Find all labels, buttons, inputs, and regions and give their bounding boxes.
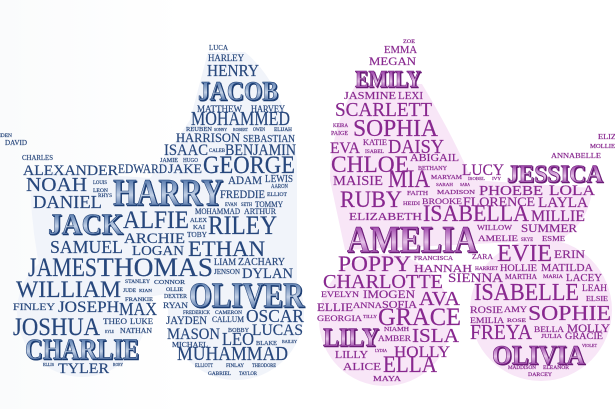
word cloud: boys' names in blue: ELLIOTT [195, 364, 213, 369]
word cloud: girls' names in pink: LEAH [582, 283, 608, 293]
word cloud: girls' names in pink: ANNABELLE [551, 152, 601, 160]
featured name: Jack: JACK [48, 208, 124, 241]
word cloud: boys' names in blue: ISAAC [164, 142, 208, 159]
word cloud: boys' names in blue: GEORGE [203, 152, 295, 179]
word cloud: girls' names in pink: MIA [388, 166, 430, 193]
word cloud: boys' names in blue: MOHAMMAD [195, 207, 240, 216]
word cloud: boys' names in blue: ELLIOT [267, 193, 287, 198]
word cloud: boys' names in blue: LEWIS [265, 174, 293, 185]
silhouette: blue pram [17, 52, 304, 380]
word cloud: boys' names in blue: ZACHARY [238, 257, 285, 268]
word cloud: boys' names in blue: REUBEN [186, 127, 213, 133]
word cloud: girls' names in pink: LILLY [335, 350, 368, 361]
word cloud: boys' names in blue: MATTHEW [197, 105, 242, 115]
word cloud: boys' names in blue: HUGO [183, 158, 199, 164]
word cloud: girls' names in pink: ERIN [554, 247, 585, 261]
word cloud: girls' names in pink: MILLIE [531, 208, 585, 225]
word cloud: boys' names in blue: CALLUM [212, 315, 244, 324]
word cloud: girls' names in pink: DAISY [388, 136, 444, 158]
word cloud: boys' names in blue: KYLE [105, 329, 114, 334]
word cloud: boys' names in blue: LUKE [130, 317, 153, 326]
word cloud: girls' names in pink: SIENNA [448, 270, 504, 285]
word cloud: boys' names in blue: HENRY [207, 61, 259, 80]
word cloud: boys' names in blue: THEODORE [252, 364, 276, 369]
word cloud: girls' names in pink: ISABELLE [474, 280, 579, 306]
word cloud: boys' names in blue: SAMUEL [50, 237, 123, 257]
word cloud: boys' names in blue: HARRISON [176, 130, 241, 145]
word cloud: girls' names in pink: FLORENCE [463, 195, 535, 209]
word cloud: girls' names in pink: EVIE [497, 241, 552, 267]
word cloud: girls' names in pink: GEORGIA [317, 313, 363, 323]
word cloud: boys' names in blue: OLLIE [166, 288, 183, 293]
featured name: Jacob: JACOB [198, 76, 278, 106]
word cloud: boys' names in blue: CONNOR [154, 279, 186, 286]
word cloud: boys' names in blue: DYLAN [242, 266, 293, 282]
word cloud: boys' names in blue: OSCAR [246, 306, 304, 326]
word cloud: girls' names in pink: SARAH [436, 182, 454, 187]
word cloud: girls' names in pink: JULIA [541, 334, 563, 340]
featured name: Jessica: JESSICA [507, 161, 603, 188]
word cloud: boys' names in blue: SEBASTIAN [243, 134, 295, 145]
word cloud: boys' names in blue: FINLEY [13, 303, 55, 313]
word cloud: girls' names in pink: FRANCISCA [414, 256, 454, 262]
word cloud: boys' names in blue: NATHAN [120, 327, 152, 335]
word cloud: boys' names in blue: LOUIS [93, 181, 107, 186]
word cloud: girls' names in pink: IMOGEN [363, 289, 416, 301]
word cloud: boys' names in blue: JAMES [28, 253, 97, 282]
word cloud: boys' names in blue: BENJAMIN [225, 142, 296, 159]
word cloud: girls' names in pink: HOLLY [394, 344, 450, 361]
word cloud: girls' names in pink: CHARLOTTE [323, 271, 443, 293]
word cloud: girls' names in pink: FAITH [407, 191, 429, 197]
word cloud: girls' names in pink: BETHANY [418, 165, 447, 172]
word cloud: girls' names in pink: ZARA [472, 252, 494, 261]
word cloud: girls' names in pink: WILLOW [477, 223, 513, 232]
word cloud: girls' names in pink: GRACIE [565, 331, 604, 341]
word cloud: girls' names in pink: ISABEL [365, 149, 385, 155]
word cloud: girls' names in pink: ZOE [403, 40, 415, 45]
word cloud: girls' names in pink: ELSIE [586, 295, 608, 303]
word cloud: boys' names in blue: JENSON [214, 268, 240, 276]
word cloud: boys' names in blue: JUDE [123, 289, 136, 294]
word cloud: girls' names in pink: ROSE [507, 318, 527, 324]
word cloud: boys' names in blue: WILLIAM [16, 277, 121, 302]
word cloud: girls' names in pink: KATIE [363, 138, 387, 147]
word cloud: boys' names in blue: ALEXANDER [23, 163, 118, 179]
word cloud: boys' names in blue: LOGAN [132, 244, 184, 259]
word cloud: girls' names in pink [317, 40, 615, 383]
word cloud: girls' names in pink: ELLIE [317, 300, 353, 314]
word cloud: girls' names in pink: LACEY [566, 272, 602, 284]
word cloud: boys' names in blue: LIAM [214, 257, 236, 267]
word cloud: girls' names in pink: GRACE [378, 304, 461, 331]
word cloud: girls' names in pink: SOPHIE [528, 301, 611, 325]
word cloud: boys' names in blue: NOAH [26, 174, 87, 196]
word cloud: girls' names in pink: AMBER [378, 334, 412, 343]
word cloud: boys' names in blue: ETHAN [188, 236, 265, 261]
featured name: Charlie: CHARLIE [25, 333, 139, 366]
featured name: Amelia: AMELIA [347, 219, 477, 261]
word cloud: boys' names in blue: EDWARD [118, 161, 167, 176]
word cloud: girls' names in pink: MOLLIE [590, 144, 615, 150]
word cloud: boys' names in blue: ARCHIE [124, 231, 185, 247]
word cloud: girls' names in pink: RUBY [340, 187, 402, 212]
word cloud: girls' names in pink: LOLA [549, 183, 595, 199]
word cloud: girls' names in pink: AMELIE [478, 233, 518, 243]
word cloud: girls' names in pink: DARCEY [528, 373, 552, 378]
word cloud: boys' names in blue: LUCA [209, 44, 228, 52]
word cloud: boys' names in blue: HARLEY [208, 53, 244, 63]
word cloud: boys' names in blue: MUHAMMAD [177, 343, 288, 365]
word cloud: girls' names in pink: FREYA [470, 320, 533, 344]
word cloud: boys' names in blue: HARVEY [251, 104, 285, 114]
word cloud: girls' names in pink: CHLOE [331, 152, 409, 177]
word cloud: boys' names in blue: JOSHUA [13, 314, 100, 341]
word cloud: boys' names in blue: RYAN [163, 300, 188, 310]
word cloud: girls' names in pink: MAYA [373, 375, 401, 383]
word cloud: boys' names in blue: JAYDEN [166, 315, 208, 327]
word cloud: boys' names in blue: RHYS [98, 194, 112, 199]
word cloud: girls' names in pink: MOLLY [567, 321, 610, 335]
word cloud: girls' names in pink: EMMA [384, 45, 418, 56]
word cloud: boys' names in blue: BOBBY [228, 327, 249, 334]
word cloud: boys' names in blue: OWEN [253, 128, 265, 133]
word cloud: boys' names in blue: MAX [119, 299, 157, 319]
word cloud: girls' names in pink: MARIA [543, 274, 563, 280]
word cloud: girls' names in pink: LUCY [462, 162, 504, 179]
word cloud: girls' names in pink: IVY [492, 176, 502, 181]
word cloud: boys' names in blue: LEON [93, 189, 108, 194]
word cloud: girls' names in pink: KEIRA [333, 124, 348, 129]
word cloud: girls' names in pink: BELLA [534, 325, 564, 334]
word cloud: girls' names in pink: BROOKE [422, 196, 462, 206]
word cloud: girls' names in pink: HEIDI [403, 202, 420, 207]
word cloud: girls' names in pink: EVA [330, 140, 360, 157]
word cloud: girls' names in pink: POPPY [338, 251, 411, 276]
word cloud: girls' names in pink: HANNAH [414, 263, 472, 275]
word cloud: boys' names in blue: STANLEY [125, 279, 150, 285]
word cloud: boys' names in blue: ALEX [190, 218, 208, 224]
word cloud: girls' names in pink: ALICE [343, 362, 381, 373]
featured name: Harry: HARRY [113, 172, 223, 214]
word cloud: girls' names in pink: ISOBEL [468, 176, 485, 181]
word cloud: girls' names in pink: ISABELLA [423, 201, 529, 226]
word cloud: boys' names in blue: KAI [193, 225, 205, 231]
word cloud: girls' names in pink: AMY [504, 305, 527, 314]
word cloud: boys' names in blue: LUCAS [252, 322, 303, 339]
word cloud: girls' names in pink: MEGAN [369, 56, 417, 68]
word cloud: girls' names in pink: SOFIA [382, 300, 418, 311]
word cloud: boys' names in blue: TOMMY [255, 200, 283, 209]
word cloud: boys' names in blue: SONNY [214, 127, 228, 132]
word cloud: boys' names in blue: BAILEY [282, 339, 298, 344]
word cloud: girls' names in pink: MATILDA [541, 262, 593, 274]
word cloud: girls' names in pink: LAYLA [538, 195, 588, 211]
word cloud: boys' names in blue: ELLIS [43, 362, 54, 367]
word cloud: boys' names in blue: MOHAMMED [191, 108, 290, 130]
word cloud: boys' names in blue: BLAKE [256, 340, 277, 347]
word cloud: boys' names in blue: ARTHUR [244, 207, 277, 216]
word cloud: boys' names in blue: FRANKIE [125, 297, 154, 303]
word cloud: boys' names in blue [0, 44, 305, 377]
word cloud: boys' names in blue: DANIEL [33, 192, 102, 212]
word cloud: girls' names in pink: TILLY [363, 314, 378, 319]
word cloud: girls' names in pink: PHOEBE [479, 184, 543, 199]
word cloud: girls' names in pink: MARTHA [505, 273, 537, 281]
word cloud: boys' names in blue: EVAN [225, 203, 237, 208]
word cloud: girls' names in pink: SOPHIA [353, 116, 439, 142]
word cloud: boys' names in blue: CAMERON [215, 311, 242, 316]
word cloud: boys' names in blue: THOMAS [97, 253, 213, 282]
word cloud: boys' names in blue: ROBERT [233, 127, 248, 132]
word cloud: boys' names in blue: RORY [113, 362, 123, 367]
word cloud: boys' names in blue: JAKE [168, 161, 202, 176]
featured name: Olivia: OLIVIA [492, 340, 585, 370]
word cloud: girls' names in pink: ELLA [383, 352, 437, 377]
word cloud: girls' names in pink: SUMMER [521, 221, 577, 235]
word cloud: girls' names in pink: LEXI [398, 90, 423, 102]
word cloud: boys' names in blue: KIAN [139, 288, 153, 293]
word cloud: girls' names in pink: EMILIA [470, 315, 505, 325]
word cloud: girls' names in pink: MADISON [437, 189, 475, 196]
word cloud: girls' names in pink: NIAMH [384, 327, 410, 333]
word cloud: girls' names in pink: MARYAM [431, 175, 463, 181]
word cloud: girls' names in pink: ABIGAIL [410, 152, 459, 164]
word cloud: girls' names in pink: ELIZABETH [349, 211, 422, 223]
word cloud: boys' names in blue: ADAM [228, 173, 262, 187]
word cloud: girls' names in pink: SCARLETT [335, 99, 432, 121]
word cloud: girls' names in pink: HARRIET [475, 267, 498, 272]
word cloud: boys' names in blue: JAMIE [160, 158, 178, 164]
featured name: Lily: LILY [323, 323, 379, 352]
word cloud: girls' names in pink: PAIGE [331, 131, 348, 137]
word cloud: boys' names in blue: LEO [222, 329, 254, 349]
word cloud: boys' names in blue: MASON [167, 326, 220, 343]
word cloud: boys' names in blue: CALEB [209, 149, 226, 154]
word cloud: girls' names in pink: ISLA [412, 325, 460, 347]
word cloud: boys' names in blue: SETH [241, 203, 252, 208]
featured name: Emily: EMILY [355, 67, 421, 93]
word cloud: boys' names in blue: FREDERICK [183, 311, 210, 316]
word cloud: girls' names in pink: AVA [419, 288, 461, 310]
word cloud: boys' names in blue: FREDDIE [220, 189, 265, 201]
featured name: Oliver: OLIVER [189, 275, 305, 315]
word cloud: girls' names in pink: ELEANOR [543, 366, 570, 371]
word cloud: boys' names in blue: ALFIE [123, 207, 189, 234]
word cloud: boys' names in blue: THEO [103, 317, 127, 326]
word cloud: girls' names in pink: ROSIE [470, 305, 504, 315]
word cloud: girls' names in pink: ANNA [353, 301, 382, 310]
word cloud: boys' names in blue: FINLAY [226, 364, 244, 369]
word cloud: boys' names in blue: RILEY [208, 211, 277, 240]
word cloud: girls' names in pink: VIOLET [582, 343, 598, 348]
word cloud: boys' names in blue: JOSEPH [58, 299, 119, 316]
word cloud: girls' names in pink: HOLLIE [500, 263, 538, 273]
word cloud: girls' names in pink: SARA [460, 182, 470, 187]
word cloud: boys' names in blue: TOBY [187, 231, 207, 239]
word cloud: girls' names in pink: MADDISON [508, 366, 536, 371]
word cloud: girls' names in pink: MAISIE [333, 174, 383, 189]
word cloud: girls' names in pink: EVELYN [321, 290, 359, 299]
word cloud: boys' names in blue: TAYLOR [239, 371, 257, 377]
word cloud: boys' names in blue: CHARLES [22, 154, 53, 162]
word cloud: boys' names in blue: AARON [271, 184, 289, 190]
word cloud: girls' names in pink: JASMINE [344, 90, 396, 102]
word cloud: boys' names in blue: DEXTER [164, 294, 187, 300]
word cloud: girls' names in pink: SKYE [521, 238, 533, 243]
word cloud: boys' names in blue: MICHAEL [172, 341, 208, 349]
word cloud: boys' names in blue: DAVID [5, 139, 27, 147]
word cloud: girls' names in pink: LYDIA [375, 348, 388, 353]
word cloud: boys' names in blue: TYLER [58, 361, 109, 377]
word cloud: boys' names in blue: GABRIEL [208, 371, 232, 377]
silhouette: pink pram [319, 84, 612, 386]
word cloud: boys' names in blue: ELIJAH [274, 128, 292, 133]
word cloud: girls' names in pink: ESME [542, 235, 565, 243]
